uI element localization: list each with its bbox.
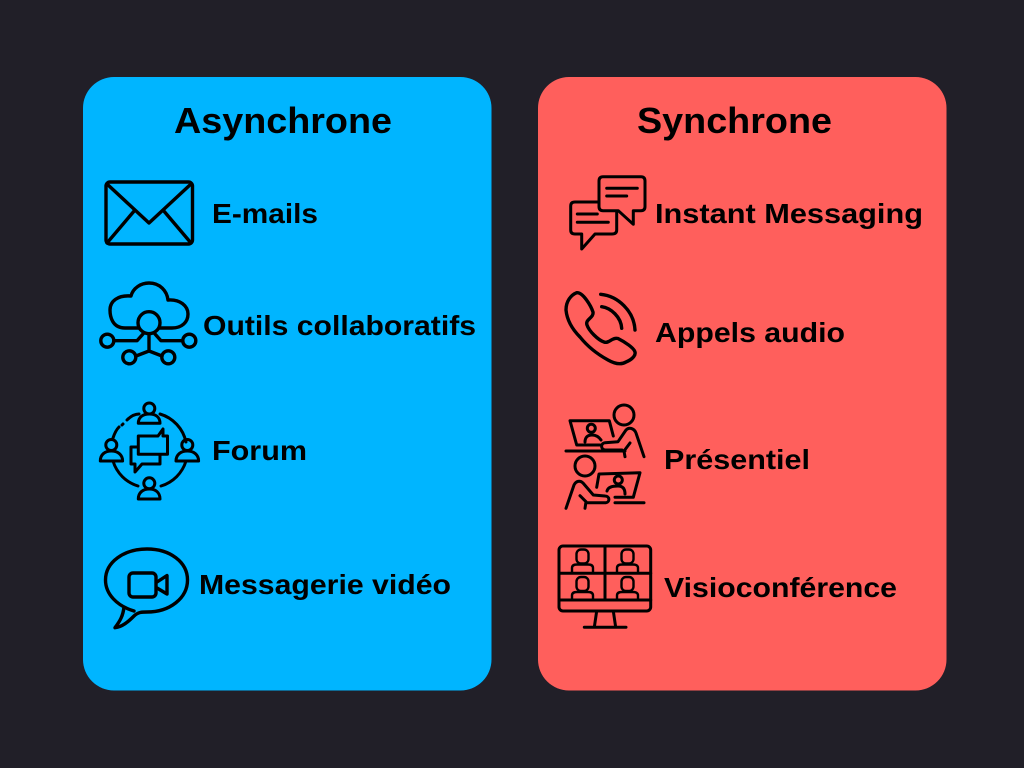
label: Appels audio: Appels audio: [655, 317, 845, 348]
label: Messagerie vidéo: Messagerie vidéo: [199, 569, 451, 600]
heading: Synchrone: Synchrone: [637, 100, 832, 141]
icon: phone: [566, 293, 635, 364]
icon: forum community: [100, 403, 199, 499]
icon: video conference monitor: [559, 546, 651, 627]
heading: Asynchrone: Asynchrone: [174, 100, 392, 141]
icon: chat bubbles: [571, 177, 645, 249]
label: Forum: Forum: [212, 435, 307, 466]
label: Instant Messaging: Instant Messaging: [655, 198, 923, 229]
label: Visioconférence: Visioconférence: [664, 572, 897, 603]
panel: Asynchrone: [83, 77, 492, 690]
label: E-mails: E-mails: [212, 198, 318, 229]
panel: Synchrone: [538, 77, 946, 690]
icon: envelope: [106, 182, 192, 244]
label: Présentiel: Présentiel: [664, 444, 810, 475]
icon: cloud network: [101, 283, 196, 364]
label: Outils collaboratifs: Outils collaboratifs: [203, 310, 476, 341]
icon: face-to-face laptops: [566, 405, 644, 508]
icon: video message: [106, 549, 188, 628]
